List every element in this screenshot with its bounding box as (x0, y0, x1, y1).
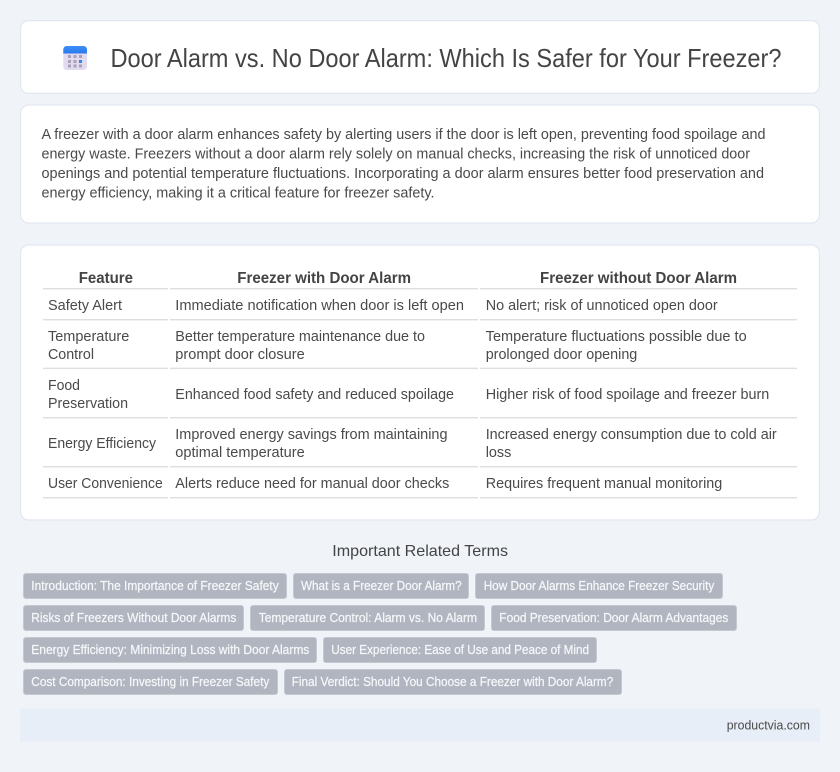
text block: introduction (42, 127, 766, 202)
table row: temperature control: Temperature fluctuations possible due to (486, 329, 747, 345)
table row: energy efficiency: Energy Efficiency (48, 436, 157, 452)
table row: temperature control: Better temperature maintenance due to (175, 329, 425, 345)
table row: food preservation (43, 378, 797, 418)
table row: user convenience (43, 476, 797, 498)
table row: food preservation: Enhanced food safety and reduced spoilage (175, 387, 454, 403)
heading: important related terms: Important Related Terms (332, 543, 508, 560)
tag: energy efficiency: Energy Efficiency: Minimizing Loss with Door Alarms (31, 643, 309, 657)
tag: user experience: User Experience: Ease of Use and Peace of Mind (331, 643, 589, 657)
table row: energy efficiency (43, 427, 797, 467)
tag: temperature control (250, 606, 484, 630)
table row: food preservation: Higher risk of food spoilage and freezer burn (486, 387, 769, 403)
table row: temperature control (43, 329, 797, 369)
title: Door Alarm vs. No Door Alarm: Which Is Safer for Your Freezer? (110, 45, 782, 73)
tag: introduction: Introduction: The Importance of Freezer Safety (31, 579, 279, 593)
tag: food preservation (492, 606, 736, 630)
text block: introduction: energy waste. Freezers without a door alarm rely solely on manual checks, increasing the risk of unnoticed door (42, 147, 750, 163)
table row: user convenience: Alerts reduce need for manual door checks (175, 476, 449, 492)
table row: energy efficiency: Improved energy savings from maintaining (175, 427, 448, 443)
tag: food preservation: Food Preservation: Door Alarm Advantages (499, 611, 728, 625)
table row: temperature control: prompt door closure (175, 347, 305, 363)
table row: safety alert (43, 298, 797, 320)
tag: cost comparison: Cost Comparison: Investing in Freezer Safety (31, 675, 270, 689)
table header row: Feature (79, 270, 133, 287)
tag: what is a door alarm (294, 574, 468, 598)
footer source text: productvia.com (727, 717, 810, 732)
tag: energy efficiency (24, 638, 316, 662)
tag: final verdict: Final Verdict: Should You Choose a Freezer with Door Alarm? (292, 675, 613, 689)
tag: user experience (324, 638, 596, 662)
table header row: Freezer with Door Alarm (237, 270, 411, 287)
panel: comparison table (21, 245, 819, 520)
tag: temperature control: Temperature Control: Alarm vs. No Alarm (259, 611, 477, 625)
tag: final verdict (284, 670, 622, 694)
table row: safety alert: No alert; risk of unnoticed open door (486, 298, 718, 314)
table row: energy efficiency: Increased energy consumption due to cold air (486, 427, 777, 443)
table row: user convenience: Requires frequent manual monitoring (486, 476, 722, 492)
table row: food preservation: Food (48, 378, 80, 394)
icon: calendar (63, 46, 87, 70)
panel: title header (21, 21, 819, 93)
table row: safety alert: Safety Alert (48, 298, 122, 314)
panel: introduction (21, 105, 819, 223)
tag: enhance security (476, 574, 722, 598)
text block: introduction: A freezer with a door alarm enhances safety by alerting users if the door is left open, preventing food spoilage and (42, 127, 766, 143)
table header row: Freezer without Door Alarm (540, 270, 737, 287)
footer (20, 708, 820, 742)
table row: temperature control: Control (48, 347, 94, 363)
panel: related term tags (24, 574, 736, 694)
table row: safety alert: Immediate notification when door is left open (175, 298, 464, 314)
tag: cost comparison (24, 670, 278, 694)
tag: enhance security: How Door Alarms Enhance Freezer Security (484, 579, 715, 593)
table row: energy efficiency: optimal temperature (175, 445, 305, 461)
table row: energy efficiency: loss (486, 445, 511, 461)
table header row (43, 270, 797, 289)
tag: what is a door alarm: What is a Freezer Door Alarm? (301, 579, 462, 593)
text block: introduction: openings and potential temperature fluctuations. Incorporating a door alarm ensures better food preservation and (42, 166, 764, 182)
tag: risks: Risks of Freezers Without Door Alarms (31, 611, 236, 625)
table row: temperature control: prolonged door opening (486, 347, 637, 363)
tag: risks (24, 606, 244, 630)
table row: food preservation: Preservation (48, 396, 128, 412)
table row: temperature control: Temperature (48, 329, 129, 345)
text block: introduction: energy efficiency, making it a critical feature for freezer safety. (42, 186, 435, 202)
table row: user convenience: User Convenience (48, 476, 163, 492)
tag: introduction (24, 574, 286, 598)
